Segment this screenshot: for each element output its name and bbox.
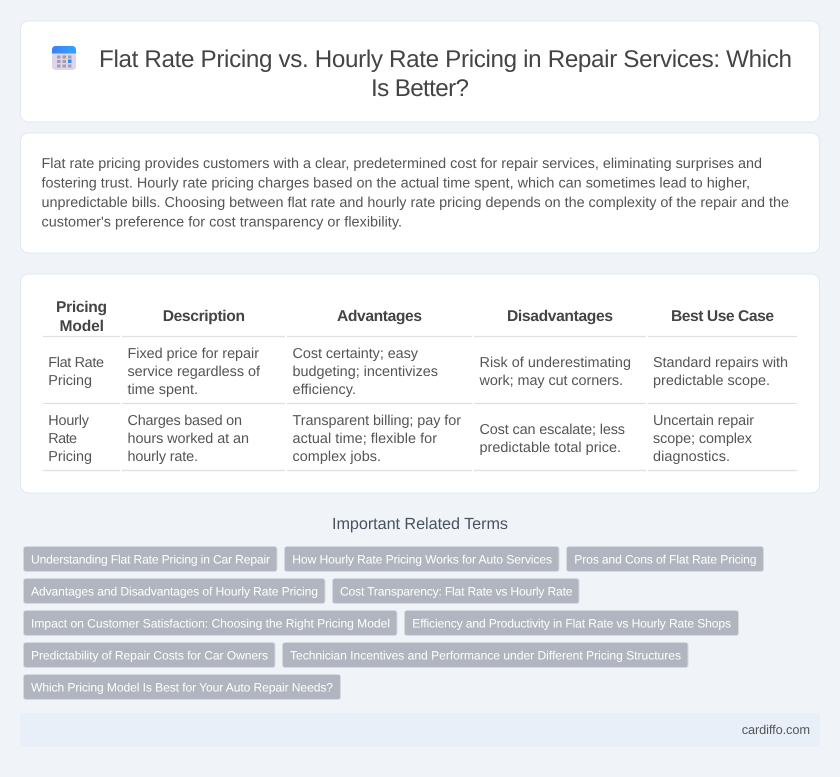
table row: hourly rate pricing: scope; complex	[653, 431, 753, 447]
table row: hourly rate pricing	[48, 413, 754, 465]
tag: pros and cons	[566, 546, 764, 572]
table header row: Pricing	[56, 299, 107, 316]
table row: hourly rate pricing: Pricing	[48, 449, 92, 465]
footer bar	[20, 713, 820, 747]
tag: predictability	[24, 642, 275, 668]
table row: hourly rate pricing: Charges based on	[128, 413, 242, 429]
icon: calendar	[52, 46, 76, 70]
heading: important related terms: Important Related Terms	[332, 515, 508, 533]
table row: flat rate pricing: budgeting; incentivizes	[292, 364, 438, 380]
table row: hourly rate pricing: actual time; flexible for	[292, 431, 437, 447]
table row: hourly rate pricing: Uncertain repair	[653, 413, 754, 429]
tag: cost transparency: Cost Transparency: Flat Rate vs Hourly Rate	[340, 584, 573, 598]
tag: efficiency and productivity: Efficiency and Productivity in Flat Rate vs Hourly Rate Shops	[412, 616, 731, 630]
table header row: Model	[60, 318, 104, 335]
table row: flat rate pricing: Pricing	[48, 373, 92, 389]
tag: which pricing model	[24, 674, 340, 700]
table row: hourly rate pricing: hourly rate.	[128, 449, 198, 465]
intro paragraph: Flat rate pricing provides customers with a clear, predetermined cost for repair services, eliminating surprises and	[42, 156, 762, 172]
tag: advantages and disadvantages: Advantages and Disadvantages of Hourly Rate Pricing	[31, 584, 318, 598]
table row: flat rate pricing: service regardless of	[128, 364, 261, 380]
tag: how hourly rate works	[284, 546, 559, 572]
table row: hourly rate pricing: hours worked at an	[128, 431, 249, 447]
title	[99, 46, 792, 102]
title: Flat Rate Pricing vs. Hourly Rate Pricing in Repair Services: Which	[99, 46, 792, 73]
footer source: cardiffo.com	[742, 722, 810, 737]
header panel	[20, 21, 820, 122]
tag: pros and cons: Pros and Cons of Flat Rate Pricing	[574, 552, 756, 566]
table header row: Advantages	[337, 308, 422, 325]
table row: flat rate pricing	[48, 346, 788, 398]
table row: hourly rate pricing: Hourly	[48, 413, 90, 429]
table row: hourly rate pricing: Rate	[48, 431, 77, 447]
intro paragraph: fostering trust. Hourly rate pricing charges based on the actual time spent, which can sometimes lead to higher,	[42, 176, 750, 192]
table row: flat rate pricing: Fixed price for repair	[128, 346, 259, 362]
tag: predictability: Predictability of Repair Costs for Car Owners	[31, 648, 268, 662]
intro paragraph: customer's preference for cost transparency or flexibility.	[42, 214, 402, 230]
table row: flat rate pricing: time spent.	[128, 382, 198, 398]
tag: customer satisfaction: Impact on Customer Satisfaction: Choosing the Right Pricing Model	[31, 616, 390, 630]
table header row: Description	[163, 308, 245, 325]
table row: flat rate pricing: predictable scope.	[653, 373, 770, 389]
table row: flat rate pricing: Cost certainty; easy	[292, 346, 419, 362]
title: Is Better?	[371, 75, 469, 102]
tag: cost transparency	[332, 578, 579, 604]
panel: intro	[20, 133, 820, 253]
table header row	[56, 299, 774, 335]
table header row: Best Use Case	[671, 308, 774, 325]
table row: hourly rate pricing: Cost can escalate; less	[480, 422, 625, 438]
tag: advantages and disadvantages	[24, 578, 325, 604]
intro paragraph	[42, 156, 789, 230]
related term tags	[24, 546, 764, 700]
table row: hourly rate pricing: diagnostics.	[653, 449, 730, 465]
intro paragraph: unpredictable bills. Choosing between flat rate and hourly rate pricing depends on the complexity of the repair and the	[42, 195, 789, 211]
tag: efficiency and productivity	[404, 610, 738, 636]
table row: hourly rate pricing: complex jobs.	[292, 449, 381, 465]
table header row: Disadvantages	[507, 308, 613, 325]
tag: understanding flat rate	[24, 546, 277, 572]
tag: technician incentives	[282, 642, 688, 668]
panel: comparison table	[20, 274, 820, 493]
table row: flat rate pricing: Flat Rate	[48, 355, 104, 371]
table row: hourly rate pricing: predictable total price.	[480, 440, 621, 456]
table row: flat rate pricing: Standard repairs with	[653, 355, 788, 371]
tag: which pricing model: Which Pricing Model Is Best for Your Auto Repair Needs?	[31, 680, 333, 694]
tag: customer satisfaction	[24, 610, 397, 636]
table row: hourly rate pricing: Transparent billing; pay for	[292, 413, 461, 429]
tag: understanding flat rate: Understanding Flat Rate Pricing in Car Repair	[31, 552, 270, 566]
table row: flat rate pricing: Risk of underestimating	[480, 355, 631, 371]
table row: flat rate pricing: work; may cut corners.	[478, 373, 623, 389]
tag: how hourly rate works: How Hourly Rate Pricing Works for Auto Services	[292, 552, 552, 566]
tag: technician incentives: Technician Incentives and Performance under Different Pricing Structures	[290, 648, 681, 662]
table row: flat rate pricing: efficiency.	[292, 382, 356, 398]
